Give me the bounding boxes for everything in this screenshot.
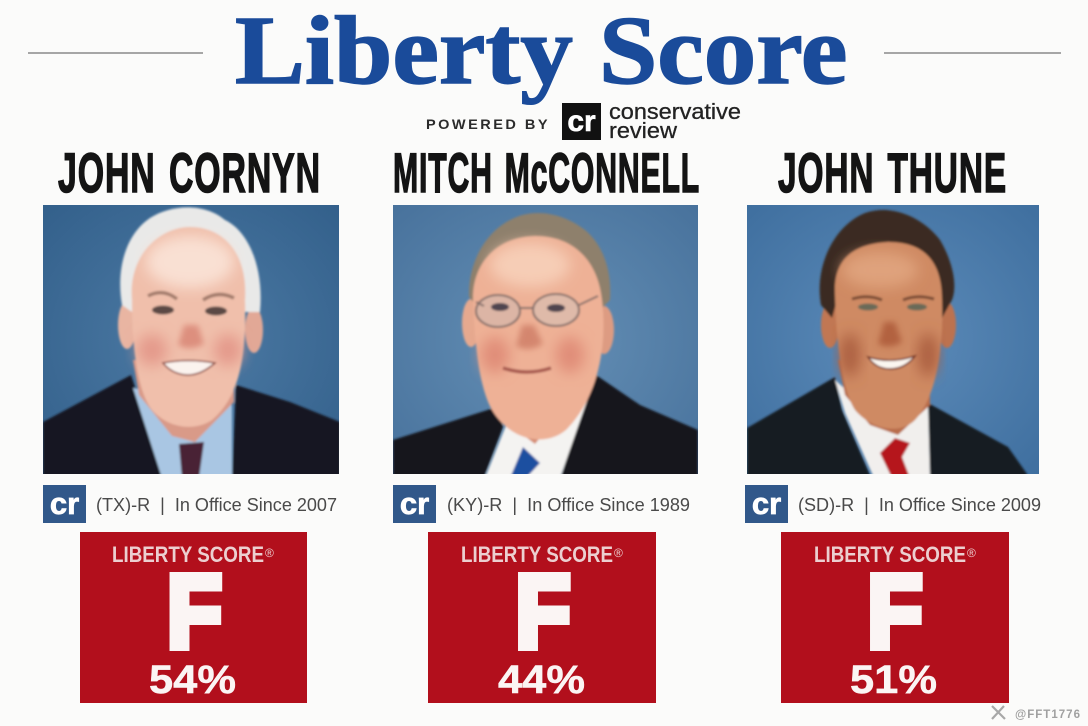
panel: John Thune xyxy=(745,141,1041,703)
score box: LIBERTY SCORE xyxy=(814,542,966,567)
watermark: @FFT1776 xyxy=(1015,709,1080,721)
cr badge: cr xyxy=(752,486,781,521)
portrait: John Cornyn xyxy=(43,205,340,480)
score box: ® xyxy=(265,546,274,560)
office info: (SD)-R | In Office Since 2009 xyxy=(798,495,1041,515)
office info: (KY)-R | In Office Since 1989 xyxy=(447,495,690,515)
score box: 44% xyxy=(498,658,585,702)
portrait: Mitch McConnell xyxy=(393,205,698,480)
cr badge xyxy=(745,485,788,523)
score box: LIBERTY SCORE xyxy=(461,542,613,567)
cr badge: cr xyxy=(400,486,429,521)
powered by conservative review logo: review xyxy=(609,118,677,143)
watermark xyxy=(992,706,1080,721)
score box xyxy=(428,532,656,703)
powered by conservative review logo: conservative xyxy=(609,99,741,124)
portrait: John Thune xyxy=(747,205,1039,480)
cr badge xyxy=(393,485,436,523)
powered by conservative review logo xyxy=(426,99,741,143)
office info: (TX)-R | In Office Since 2007 xyxy=(96,495,337,515)
panel: Mitch McConnell xyxy=(393,141,700,703)
score box: F xyxy=(516,554,570,669)
name: John Cornyn: JOHN CORNYN xyxy=(58,141,321,204)
score box xyxy=(80,532,307,703)
powered by conservative review logo: cr xyxy=(567,105,596,138)
cr badge xyxy=(43,485,86,523)
score box xyxy=(781,532,1009,703)
cr badge: cr xyxy=(50,486,79,521)
powered by conservative review logo: POWERED BY xyxy=(426,116,550,132)
score box: ® xyxy=(614,546,623,560)
score box: F xyxy=(868,554,922,669)
score box: LIBERTY SCORE xyxy=(112,542,264,567)
score box: F xyxy=(167,554,222,669)
score box: 51% xyxy=(850,658,937,702)
score box: 54% xyxy=(149,658,236,702)
panel: John Cornyn xyxy=(43,141,340,703)
score box: ® xyxy=(967,546,976,560)
name: Mitch McConnell: MITCH McCONNELL xyxy=(393,141,700,204)
